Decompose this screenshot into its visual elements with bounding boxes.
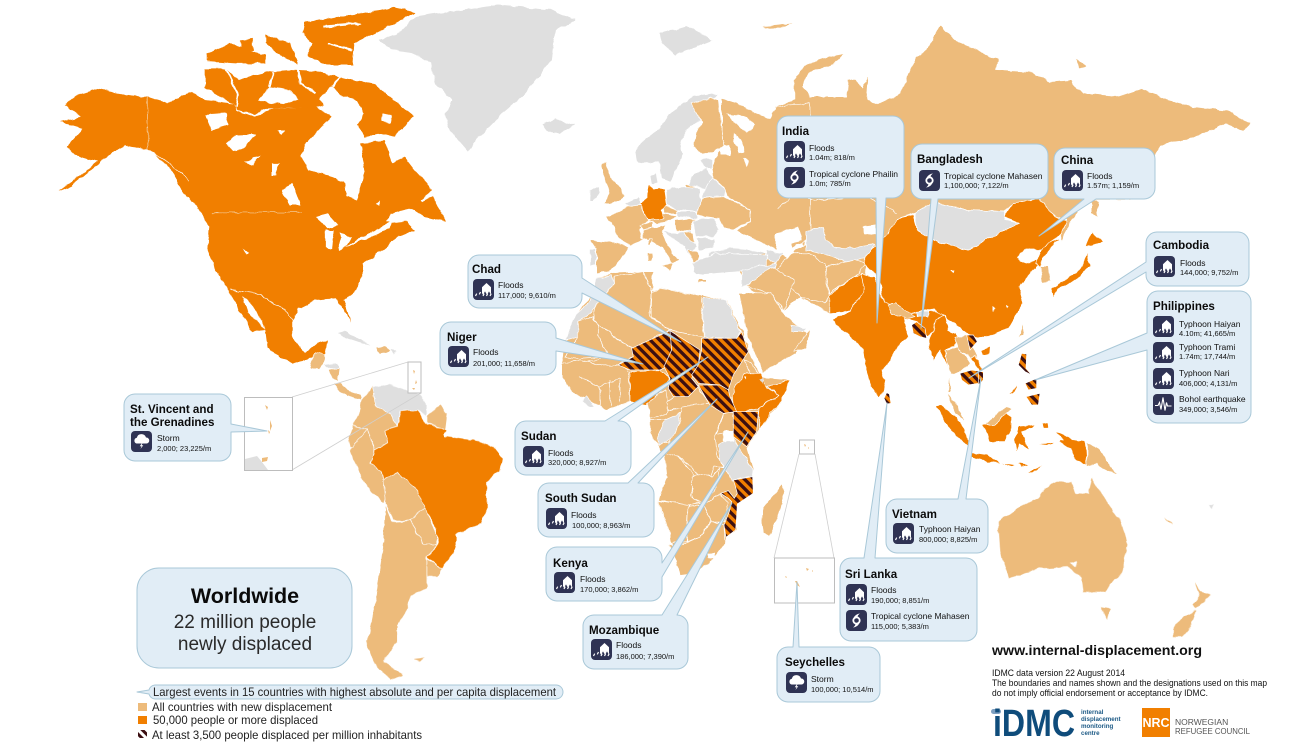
panel: Worldwide total: newly displaced	[178, 634, 312, 655]
callout: Chad: Floods	[498, 280, 524, 290]
callout: China: China	[1061, 154, 1094, 167]
logo: Norwegian Refugee Council: REFUGEE COUNCIL	[1175, 726, 1250, 736]
footer: website and disclaimer: www.internal-displacement.org	[991, 642, 1202, 658]
Oceania	[998, 478, 1214, 637]
callout: Philippines: 349,000; 3,546/m	[1179, 405, 1237, 414]
logo: IDMC: monitoring	[1081, 723, 1114, 730]
legend	[137, 685, 563, 742]
callout: St. Vincent and the Grenadines: St. Vincent and	[130, 403, 214, 416]
callout: Bangladesh: 1,100,000; 7,122/m	[944, 181, 1009, 190]
callout: Mozambique: Floods	[616, 640, 642, 650]
callout: Niger	[440, 322, 643, 375]
panel: Worldwide total: Worldwide	[191, 584, 299, 608]
logo: IDMC: internal	[1081, 709, 1104, 716]
callout: Philippines: Typhoon Nari	[1179, 368, 1230, 378]
callout: Philippines: Philippines	[1153, 300, 1215, 313]
callout: St. Vincent and the Grenadines	[124, 394, 267, 461]
callout: Vietnam: Vietnam	[892, 508, 937, 521]
Africa east and south	[647, 373, 790, 575]
logo: Norwegian Refugee Council: NORWEGIAN	[1175, 717, 1228, 727]
callout: Sri Lanka: Sri Lanka	[845, 568, 898, 581]
callout: Vietnam: 800,000; 8,825/m	[919, 535, 977, 544]
callout: South Sudan: South Sudan	[545, 492, 616, 505]
hatched countries: at least 3,500 displaced per million	[618, 322, 1040, 537]
callout: St. Vincent and the Grenadines: 2,000; 23,225/m	[157, 444, 211, 453]
North America	[58, 7, 446, 363]
callout: Chad	[468, 255, 681, 342]
logo: IDMC: centre	[1081, 730, 1100, 737]
panel: Worldwide total: 22 million people	[174, 612, 316, 633]
Greenland and Iceland	[379, 5, 576, 152]
callout: India: 1.04m; 818/m	[809, 153, 855, 162]
callout: Niger: Niger	[447, 331, 477, 344]
Southeast Asia	[917, 312, 1117, 473]
logo: Norwegian Refugee Council: NRC	[1142, 716, 1170, 730]
callout: Philippines: 4.10m; 41,665/m	[1179, 329, 1235, 338]
callout: St. Vincent and the Grenadines: Storm	[157, 433, 180, 443]
callout: Chad: Chad	[472, 263, 501, 276]
callout: Bangladesh: Bangladesh	[917, 153, 983, 166]
callout: India: Tropical cyclone Phailin	[809, 169, 898, 179]
callout: Philippines: 1.74m; 17,744/m	[1179, 352, 1235, 361]
callout: Philippines	[1035, 291, 1251, 423]
callout: Philippines: Typhoon Haiyan	[1179, 319, 1241, 329]
callout: Sudan: Floods	[548, 448, 574, 458]
legend: At least 3,500 people displaced per million inhabitants	[152, 728, 422, 742]
callout: Sri Lanka: Floods	[871, 585, 897, 595]
legend: 50,000 people or more displaced	[153, 713, 318, 727]
callout: Sri Lanka	[840, 403, 977, 641]
callout: India: Floods	[809, 143, 835, 153]
callout: Cambodia	[969, 232, 1249, 378]
callout: Niger: 201,000; 11,658/m	[473, 359, 535, 368]
US borders	[146, 97, 149, 150]
footer: website and disclaimer: IDMC data version 22 August 2014	[992, 668, 1125, 678]
Central America and Caribbean	[310, 331, 397, 400]
callout: Cambodia: 144,000; 9,752/m	[1180, 268, 1238, 277]
panel: Worldwide total	[137, 568, 352, 668]
callout: China: Floods	[1087, 171, 1113, 181]
callout: Sudan: 320,000; 8,927/m	[548, 458, 606, 467]
logo: Norwegian Refugee Council	[1142, 708, 1250, 737]
Africa base landmass	[562, 272, 788, 575]
callout: South Sudan	[538, 399, 717, 537]
callout: Sri Lanka: 115,000; 5,383/m	[871, 622, 929, 631]
callout: Sudan: Sudan	[521, 430, 556, 443]
callout: Kenya	[546, 432, 748, 601]
callout: Mozambique	[583, 503, 732, 669]
callout: Sri Lanka: Tropical cyclone Mahasen	[871, 611, 970, 621]
footer: website and disclaimer: The boundaries and names shown and the designations used on this map	[992, 678, 1267, 688]
Africa north and west	[562, 272, 760, 410]
callout: Seychelles: Storm	[811, 674, 834, 684]
callout: South Sudan: 100,000; 8,963/m	[572, 521, 630, 530]
callout: Seychelles: 100,000; 10,514/m	[811, 685, 874, 694]
callout: Mozambique: Mozambique	[589, 624, 660, 637]
callout: Seychelles: Seychelles	[785, 656, 845, 669]
callout: Mozambique: 186,000; 7,390/m	[616, 652, 674, 661]
Asia: Russia and Central Asia	[658, 23, 1250, 257]
callout: Chad: 117,000; 9,610/m	[498, 291, 556, 300]
Europe	[590, 93, 810, 282]
callout: Philippines: 406,000; 4,131/m	[1179, 379, 1237, 388]
footer: website and disclaimer	[991, 642, 1267, 698]
callout: India	[777, 116, 904, 323]
logo: IDMC: iDMC	[993, 703, 1075, 745]
inset: St. Vincent and the Grenadines	[244, 362, 421, 470]
callout: Vietnam: Typhoon Haiyan	[919, 524, 981, 534]
callout: Niger: Floods	[473, 347, 499, 357]
callout: St. Vincent and the Grenadines: the Grenadines	[130, 416, 214, 429]
callout: India: India	[782, 125, 810, 138]
callout: Kenya: Floods	[580, 574, 606, 584]
callout: Cambodia: Floods	[1180, 258, 1206, 268]
callout: Bangladesh	[911, 144, 1048, 328]
Asia: south, east and Middle East	[692, 197, 1102, 398]
callout: South Sudan: Floods	[571, 510, 597, 520]
callout: Vietnam	[886, 378, 988, 553]
logo: IDMC: displacement	[1081, 716, 1121, 723]
callout: Cambodia: Cambodia	[1153, 239, 1210, 252]
callout: Philippines: Typhoon Trami	[1179, 342, 1235, 352]
callout: Philippines: Bohol earthquake	[1179, 394, 1246, 404]
legend: All countries with new displacement	[152, 700, 333, 714]
callout: Sri Lanka: 190,000; 8,851/m	[871, 596, 929, 605]
South America	[348, 383, 502, 680]
callout: China	[1039, 148, 1155, 236]
callout: Bangladesh: Tropical cyclone Mahasen	[944, 171, 1043, 181]
lakes, channels and Gulf of California	[205, 23, 392, 330]
callout: Kenya: Kenya	[553, 557, 588, 570]
callout: Sudan	[515, 357, 708, 475]
callout: Seychelles	[777, 582, 880, 702]
callout: China: 1.57m; 1,159/m	[1087, 181, 1139, 190]
footer: website and disclaimer: do not imply official endorsement or acceptance by IDMC.	[992, 688, 1208, 698]
inset: Seychelles	[774, 440, 834, 603]
legend: Largest events in 15 countries with highest absolute and per capita displacement	[153, 685, 557, 699]
callout: India: 1.0m; 785/m	[809, 179, 851, 188]
callout: Kenya: 170,000; 3,862/m	[580, 585, 638, 594]
